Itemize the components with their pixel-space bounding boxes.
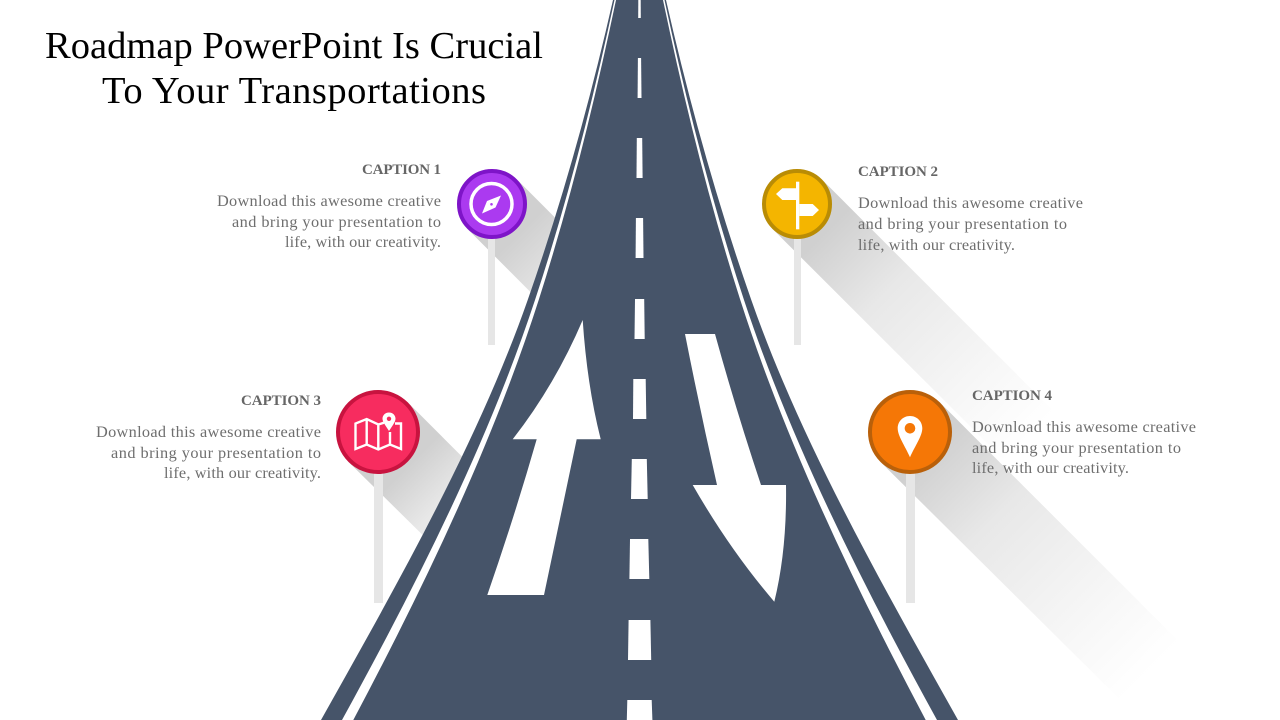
caption 2 text: and bring your presentation to <box>858 214 1067 233</box>
arrow: up lane <box>487 320 601 595</box>
shadow: caption 1 <box>467 179 740 452</box>
caption 2 text: CAPTION 2 <box>858 164 938 180</box>
caption 1 text: life, with our creativity. <box>285 232 441 251</box>
caption 4 text: life, with our creativity. <box>972 458 1129 477</box>
caption 2 text: Download this awesome creative <box>858 193 1083 212</box>
shadow: caption 2 <box>772 179 1060 467</box>
caption 4 text: and bring your presentation to <box>972 438 1181 457</box>
caption 1 text <box>217 162 441 251</box>
icon: signpost <box>764 171 830 237</box>
title: To Your Transportations <box>102 70 486 112</box>
caption 1 text: and bring your presentation to <box>232 212 441 231</box>
caption 3 text: Download this awesome creative <box>96 422 321 441</box>
pole: caption 4 <box>906 470 915 603</box>
shadow: caption 4 <box>880 402 1220 720</box>
caption 1 text: CAPTION 1 <box>362 162 441 178</box>
caption 2 text: life, with our creativity. <box>858 235 1015 254</box>
title <box>45 25 543 112</box>
caption 2 text <box>858 164 1083 254</box>
pole: caption 1 <box>488 236 495 345</box>
road <box>321 0 958 720</box>
centre dashed line <box>627 0 652 720</box>
icon: location pin <box>870 392 950 472</box>
pole: caption 2 <box>794 236 801 345</box>
caption 1 text: Download this awesome creative <box>217 191 441 210</box>
arrow: down lane <box>685 334 786 602</box>
caption 3 text: CAPTION 3 <box>241 393 321 409</box>
caption 4 text <box>972 388 1196 477</box>
caption 4 text: CAPTION 4 <box>972 388 1052 404</box>
shadow: caption 3 <box>348 402 600 653</box>
caption 3 text: life, with our creativity. <box>164 463 321 482</box>
icon: map <box>338 392 418 472</box>
caption 4 text: Download this awesome creative <box>972 417 1196 436</box>
icon: compass <box>459 171 525 237</box>
pole: caption 3 <box>374 470 383 603</box>
title: Roadmap PowerPoint Is Crucial <box>45 25 543 67</box>
caption 3 text <box>96 393 321 482</box>
caption 3 text: and bring your presentation to <box>111 443 321 462</box>
